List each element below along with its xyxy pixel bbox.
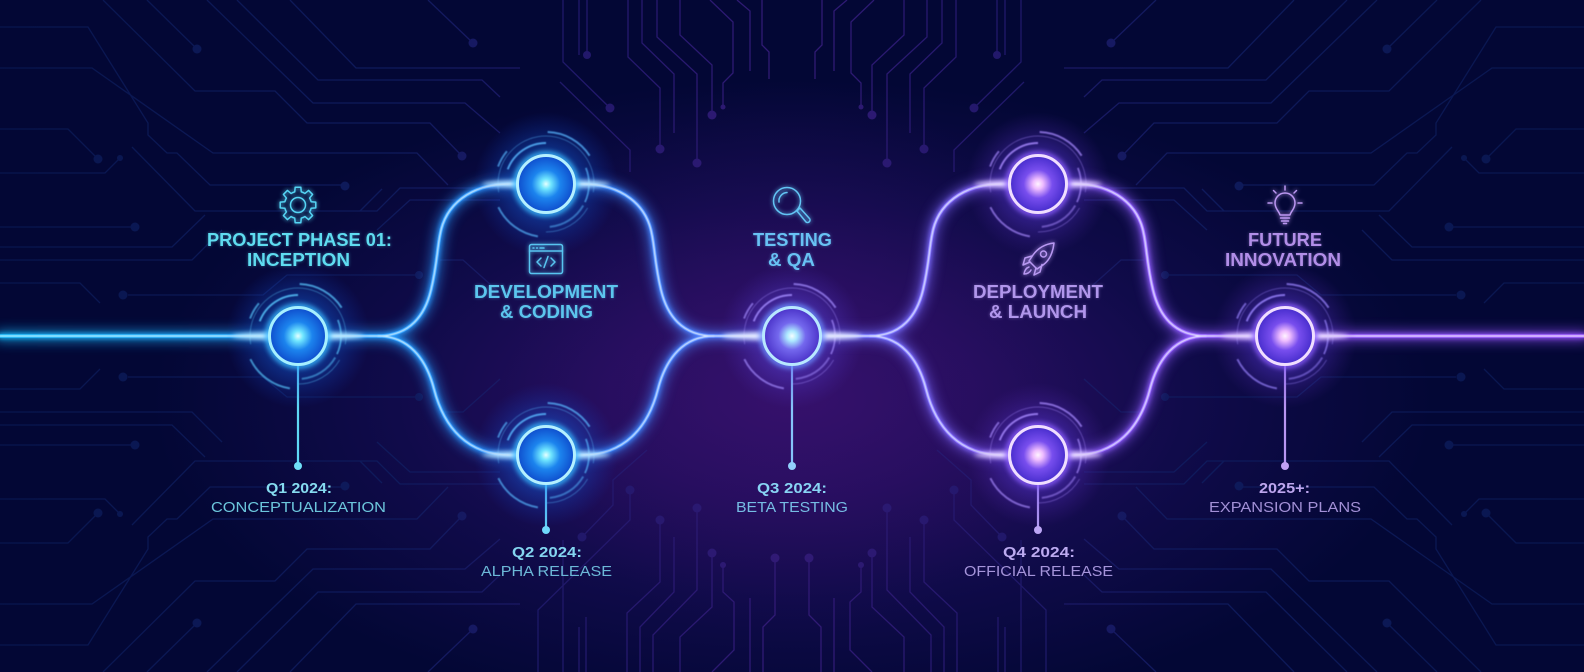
- label: Q3 2024: Q3 2024:: [757, 481, 827, 497]
- icon: light bulb: [1268, 186, 1302, 224]
- connector stems: [294, 360, 1289, 534]
- label: Q2 2024: [481, 545, 612, 580]
- heading: development and coding: [474, 282, 618, 322]
- label: Q4 2024: [964, 545, 1113, 580]
- heading: deployment and launch: DEPLOYMENT: [973, 282, 1103, 302]
- label: 2025+: 2025+:: [1259, 481, 1310, 497]
- heading: testing and QA: & QA: [768, 250, 815, 270]
- label: Q4 2024: Q4 2024:: [1003, 545, 1075, 561]
- icon: rocket: [1023, 243, 1054, 275]
- label: 2025+: EXPANSION PLANS: [1209, 499, 1361, 516]
- glowing timeline paths: [0, 184, 1584, 455]
- node: deployment top: [966, 112, 1110, 256]
- node: alpha release bottom: [474, 383, 618, 527]
- heading: development and coding: DEVELOPMENT: [474, 282, 618, 302]
- heading: project phase 01 inception: INCEPTION: [247, 250, 350, 270]
- label: Q3 2024: BETA TESTING: [736, 499, 848, 516]
- label: 2025+: [1209, 481, 1361, 516]
- heading: deployment and launch: & LAUNCH: [989, 302, 1087, 322]
- icon: gear: [280, 187, 316, 223]
- heading: project phase 01 inception: PROJECT PHASE 01:: [207, 230, 392, 250]
- heading: project phase 01 inception: [207, 230, 392, 270]
- heading: testing and QA: [753, 230, 832, 270]
- node: development top: [474, 112, 618, 256]
- node: future innovation: [1213, 264, 1357, 408]
- label: Q4 2024: OFFICIAL RELEASE: [964, 563, 1113, 580]
- icon: code window: [530, 244, 562, 274]
- heading: deployment and launch: [973, 282, 1103, 322]
- label: Q3 2024: [736, 481, 848, 516]
- label: Q1 2024: CONCEPTUALIZATION: [211, 499, 386, 516]
- heading: testing and QA: TESTING: [753, 230, 832, 250]
- label: Q1 2024: [211, 481, 386, 516]
- icon: magnifying glass: [774, 188, 810, 222]
- label: Q2 2024: ALPHA RELEASE: [481, 563, 612, 580]
- heading: future innovation: FUTURE: [1248, 230, 1322, 250]
- node: testing: [720, 264, 864, 408]
- heading: development and coding: & CODING: [500, 302, 593, 322]
- node: inception: [226, 264, 370, 408]
- label: Q2 2024: Q2 2024:: [512, 545, 582, 561]
- heading: future innovation: INNOVATION: [1225, 250, 1341, 270]
- label: Q1 2024: Q1 2024:: [266, 481, 332, 497]
- heading: future innovation: [1225, 230, 1341, 270]
- node: official release bottom: [966, 383, 1110, 527]
